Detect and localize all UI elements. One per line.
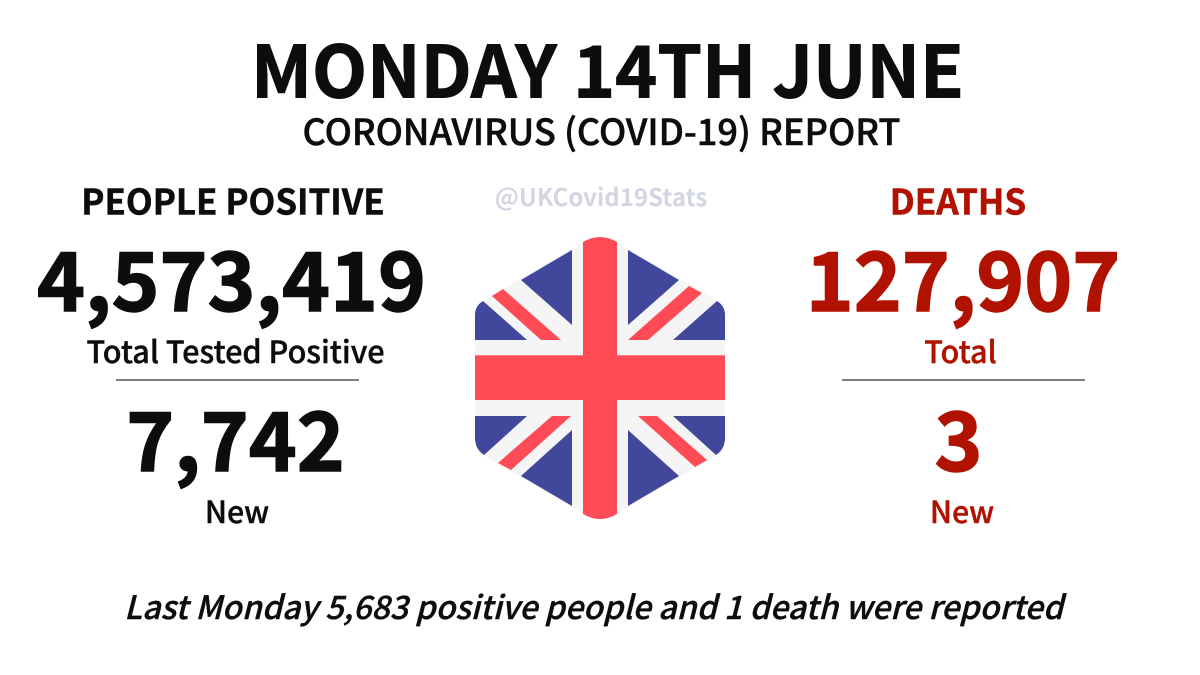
total deaths label: Total	[924, 328, 997, 372]
watermark handle: @UKCovid19Stats	[495, 178, 707, 213]
footer comparison note: Last Monday 5,683 positive people and 1 death were reported	[124, 583, 1067, 629]
subtitle: CORONAVIRUS (COVID-19) REPORT	[302, 104, 901, 156]
heading: deaths: DEATHS	[890, 174, 1026, 226]
total positive number: 4,573,419	[37, 218, 426, 335]
heading: people positive: PEOPLE POSITIVE	[81, 176, 385, 226]
total positive label: Total Tested Positive	[86, 328, 385, 372]
icon: UK flag hexagon	[475, 237, 725, 519]
new positive number: 7,742	[126, 378, 345, 495]
title: MONDAY 14TH JUNE	[251, 14, 964, 118]
panel: deaths	[806, 174, 1120, 532]
new positive label: New	[205, 488, 269, 532]
new deaths label: New	[930, 488, 994, 532]
new deaths number: 3	[934, 378, 983, 495]
total deaths number: 127,907	[806, 218, 1120, 335]
panel: people positive	[37, 176, 426, 532]
